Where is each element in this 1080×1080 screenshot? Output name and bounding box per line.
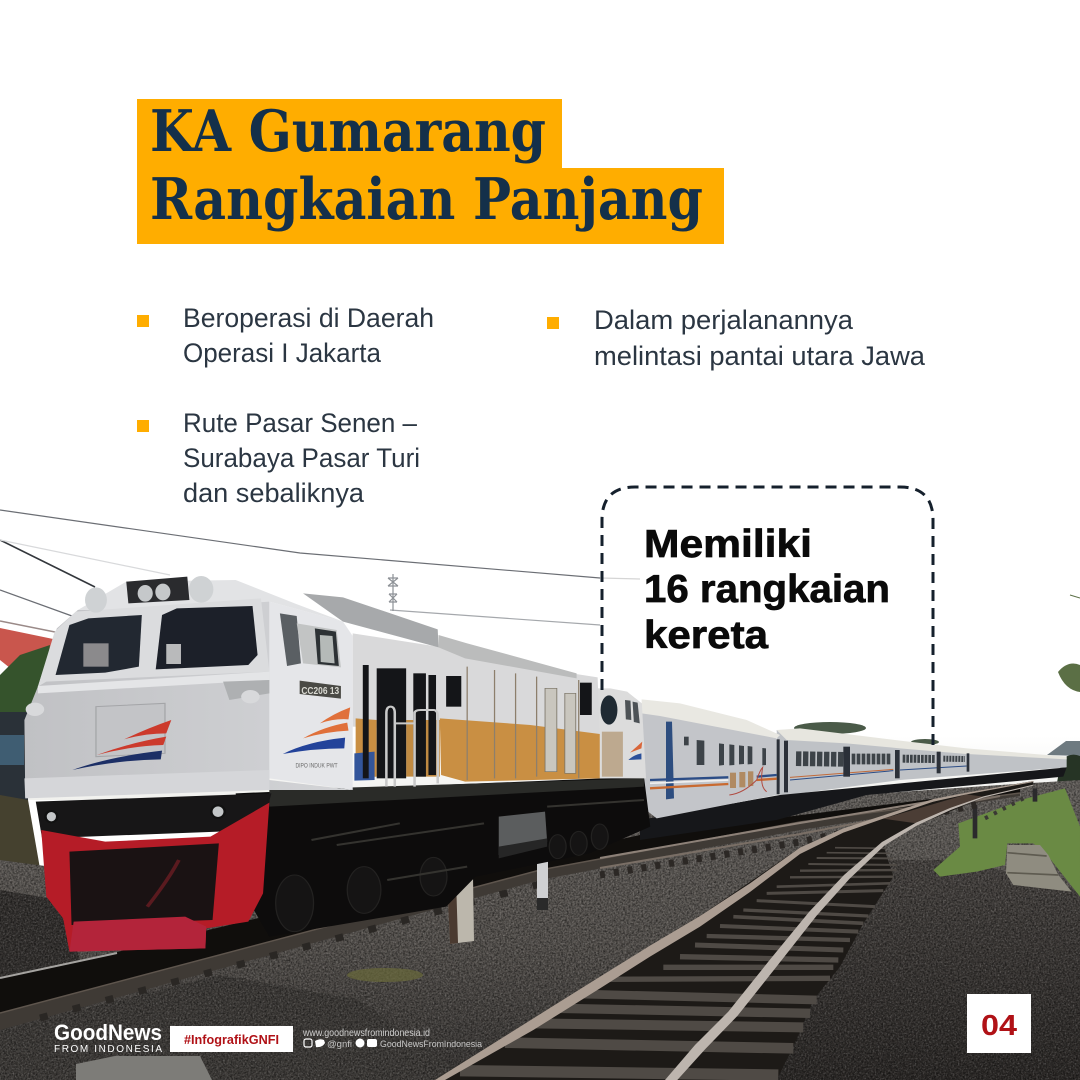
bullet: operating area: Operasi I Jakarta	[183, 338, 382, 368]
doors dark	[363, 665, 592, 778]
number plate	[300, 681, 341, 699]
ground: ballast	[0, 780, 1080, 1080]
nose logo	[72, 720, 171, 770]
cab front upper	[38, 598, 269, 687]
grass and concrete slabs	[933, 788, 1080, 897]
hashtag box: #InfografikGNFI	[184, 1032, 279, 1047]
olive weed patch	[347, 968, 423, 982]
nose upper	[24, 600, 354, 797]
near track bed	[435, 781, 1033, 1080]
louvres	[545, 688, 576, 773]
cab side window	[280, 613, 301, 666]
far carriage stripes	[790, 766, 967, 780]
thin white rail	[0, 953, 117, 978]
bullet: north coast	[547, 305, 926, 371]
right windscreen	[156, 606, 258, 669]
headlight band	[36, 793, 271, 838]
rear loco cab window	[601, 695, 617, 725]
far carriages	[777, 730, 1067, 796]
red pilot sides	[41, 803, 269, 952]
cab side	[269, 602, 353, 790]
callout text	[644, 523, 890, 657]
logo: GoodNews From Indonesia: FROM INDONESIA	[54, 1044, 162, 1055]
title highlight line 2	[137, 168, 724, 244]
sleepers	[460, 848, 897, 1075]
second rails	[600, 790, 1000, 858]
brown rail	[0, 793, 1020, 1030]
social icons and handles	[304, 1038, 482, 1049]
wheels	[276, 824, 608, 932]
carriage connectors	[776, 739, 969, 794]
bullet: route	[137, 408, 420, 508]
hood upper white	[353, 633, 600, 737]
right rail	[665, 785, 1033, 1080]
hood orange lower	[440, 718, 600, 782]
rear loco side windows	[625, 700, 631, 720]
photo: train on railway	[0, 480, 1080, 1080]
first carriage roof	[642, 699, 780, 738]
far carriage windows	[796, 737, 965, 781]
hashtag box	[170, 1026, 293, 1052]
rear loco tan panel	[602, 732, 623, 777]
red lower bumper	[69, 917, 206, 952]
handrails	[386, 707, 438, 787]
ground: left lower ballast	[0, 890, 80, 985]
nose roof	[78, 580, 343, 622]
locomotive	[24, 576, 650, 952]
bullet: operating area	[137, 303, 434, 368]
left background: building and tree	[0, 621, 60, 900]
first carriage door	[666, 722, 674, 799]
left windscreen	[56, 615, 142, 675]
callout text: kereta	[644, 614, 768, 657]
callout text: Memiliki	[644, 523, 812, 566]
concrete sleeper at bottom left	[76, 1056, 212, 1080]
lower nose plate	[24, 770, 269, 798]
website: www.goodnewsfromindonesia.id	[302, 1028, 430, 1039]
sign panels	[730, 771, 753, 788]
panel seams	[467, 667, 579, 780]
walkway	[269, 778, 644, 807]
shadow under train	[0, 788, 1020, 1013]
number plate: CC206 13	[301, 686, 339, 697]
hood roof	[303, 593, 439, 647]
logo: GoodNews From Indonesia	[54, 1020, 162, 1055]
title highlight line 1	[137, 99, 562, 169]
rear white loco	[598, 688, 646, 778]
coupler dark centre	[69, 843, 219, 925]
bullet: route: Rute Pasar Senen –	[183, 408, 417, 438]
rail fasteners	[40, 884, 540, 1018]
left rail	[435, 781, 1033, 1080]
social icons and handles: @gnfi	[327, 1039, 352, 1049]
bullet: operating area: Beroperasi di Daerah	[183, 303, 434, 333]
ballast texture	[0, 780, 1080, 1080]
cab side logo	[283, 707, 350, 754]
brown ties far	[883, 794, 983, 823]
underframe and bogies	[236, 777, 650, 937]
distant trees and buildings	[794, 722, 1080, 756]
pylon tower	[388, 574, 398, 611]
middle track	[0, 788, 1020, 1030]
right foliage	[1055, 595, 1080, 840]
page number: 04	[981, 1010, 1017, 1042]
logo: GoodNews From Indonesia: GoodNews	[54, 1020, 162, 1045]
title	[137, 98, 724, 244]
sky	[0, 480, 1080, 800]
social icons and handles: GoodNewsFromIndonesia	[380, 1039, 482, 1049]
bullet: north coast: melintasi pantai utara Jawa	[594, 341, 926, 371]
bogie details	[311, 800, 644, 880]
title line 1: KA Gumarang	[150, 98, 546, 165]
ground: lower left ballast strip	[0, 975, 470, 1080]
nose panel and latch	[26, 680, 269, 757]
rear loco stripes	[628, 753, 641, 760]
first carriage stripes	[650, 775, 777, 780]
first carriage body	[642, 703, 777, 818]
callout text: 16 rangkaian	[644, 568, 890, 611]
small text under logo: DIPO INDUK PWT	[295, 761, 338, 769]
callout: 16 carriages	[602, 487, 933, 748]
footer	[54, 994, 1031, 1080]
callout dashed outline	[602, 487, 933, 748]
bullet: route: Surabaya Pasar Turi	[183, 443, 420, 473]
bullet: route: dan sebaliknya	[183, 478, 365, 508]
underframe	[640, 767, 1067, 840]
near track	[435, 781, 1033, 1080]
ground: dark ballast heap on right	[770, 860, 1080, 1080]
fuel tank	[499, 812, 547, 855]
shelf	[38, 672, 269, 693]
title line 2: Rangkaian Panjang	[150, 166, 703, 233]
carriages	[640, 699, 1067, 840]
hose	[147, 860, 179, 907]
roof lamps	[85, 576, 213, 613]
roof headlamp box	[126, 577, 189, 603]
page number	[967, 994, 1031, 1053]
far carriage roofs	[777, 728, 1067, 759]
overhead wires	[0, 510, 640, 625]
track marker post and sign	[447, 861, 548, 944]
first carriage windows	[684, 737, 766, 766]
bullet: north coast: Dalam perjalanannya	[594, 305, 854, 335]
marker lights	[45, 811, 57, 822]
